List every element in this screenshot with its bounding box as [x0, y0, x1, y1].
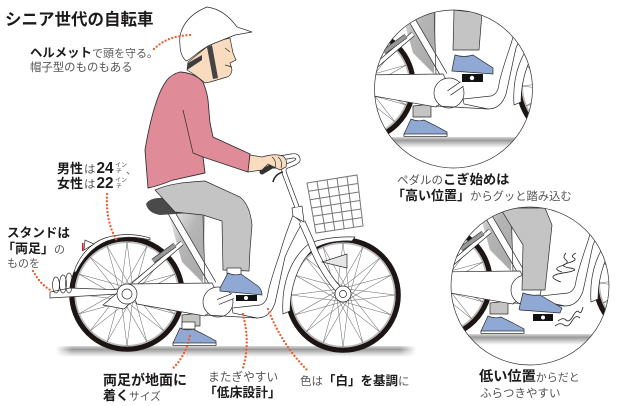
main bicycle	[50, 175, 416, 358]
callout: two-legged stand: 「両足」の	[2, 241, 65, 256]
inset circle: pedal in high position	[374, 10, 533, 168]
bicycle steering and handlebar	[262, 156, 304, 222]
title: シニア世代の自転車	[5, 9, 154, 29]
callout: feet reach the ground: 両足が地面に	[103, 372, 187, 388]
callout: white colour	[268, 309, 410, 388]
caption: low pedal position	[479, 369, 580, 400]
rider: near-side trouser leg	[155, 181, 252, 271]
near shoe on pedal	[218, 268, 262, 302]
callout: low floor design: またぎやすい	[208, 370, 278, 384]
callout: wheel size: 男性は24	[57, 160, 114, 177]
rider: saddle	[146, 198, 192, 215]
callout: low floor design: 「低床設計」	[204, 385, 281, 400]
inset 2 trouser leg	[500, 208, 552, 290]
callout: wheel size: チ	[116, 168, 122, 175]
caption: high pedal position: ペダルのこぎ始めは	[397, 171, 509, 187]
rider: far-side leg sock	[182, 322, 195, 329]
inset 1 shoe	[452, 55, 493, 74]
bicycle front basket	[307, 175, 363, 233]
caption: low pedal position: 低い位置からだと	[479, 369, 580, 385]
callout: feet reach the ground: 着くサイズ	[103, 388, 161, 403]
rider: pink shirt	[145, 72, 250, 188]
callout: wheel size: 女性は22	[57, 175, 114, 192]
caption: high pedal position: 「高い位置」からグッと踏み込む	[392, 188, 572, 203]
callout: helmet: ヘルメットで頭を守る。	[30, 46, 158, 60]
caption: low pedal position: ふらつきやすい	[480, 387, 560, 400]
callout: feet reach the ground	[103, 336, 190, 403]
callout: wheel size	[57, 160, 136, 242]
callout: low floor design	[204, 314, 281, 400]
inset 1 trouser leg	[453, 10, 482, 50]
inset 1 crank and pedal	[449, 74, 483, 93]
wobble marks	[553, 253, 583, 326]
callout: helmet	[30, 35, 190, 74]
callout: two-legged stand	[2, 226, 70, 291]
callout: two-legged stand: ものを	[7, 257, 40, 270]
callout: wheel size: 、	[126, 166, 136, 177]
callout: white colour: 色は「白」を基調に	[300, 373, 410, 388]
callout: wheel size: イン	[115, 163, 127, 169]
rider: head and helmet	[180, 7, 252, 83]
callout: helmet: 帽子型のものもある	[30, 60, 133, 74]
inset 2 pedal	[533, 314, 553, 321]
caption: high pedal position	[392, 171, 572, 203]
callout: two-legged stand: スタンドは	[7, 226, 70, 240]
inset 2 shoe	[519, 293, 562, 313]
rider: hand on grip	[248, 155, 287, 172]
callout: wheel size: チ	[116, 183, 122, 190]
rider: sleeve fold	[183, 110, 203, 157]
inset circle: pedal in low position	[450, 206, 610, 366]
callout: wheel size: イン	[115, 178, 127, 184]
